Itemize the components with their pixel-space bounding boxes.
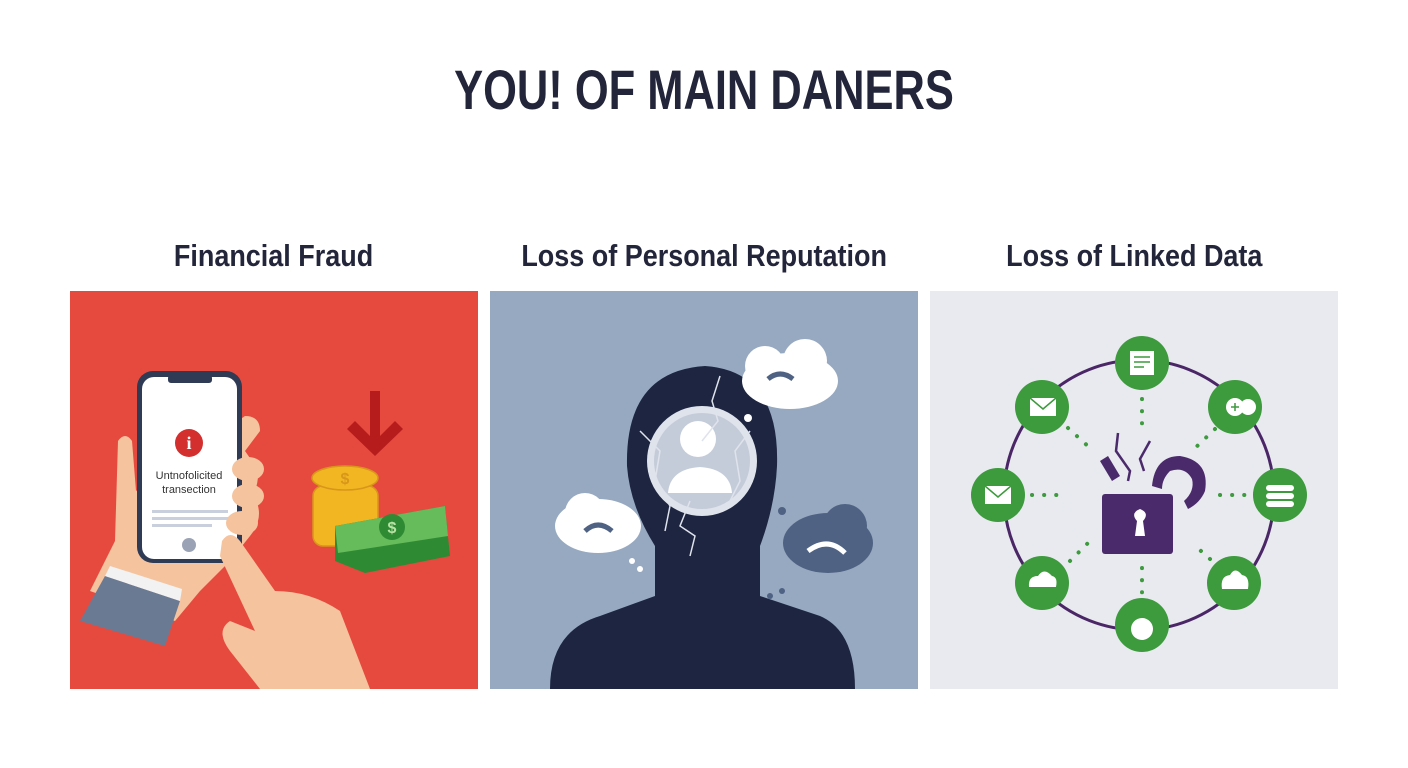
connectors bbox=[1032, 399, 1250, 596]
panel: financial fraud bbox=[70, 291, 478, 689]
icon: phone bbox=[137, 371, 242, 563]
icon: down arrow bbox=[347, 391, 403, 456]
heading: linked data: Loss of Linked Data bbox=[1006, 238, 1262, 273]
icon: fingers bbox=[226, 457, 264, 535]
heading: financial fraud: Financial Fraud bbox=[174, 238, 374, 273]
icon: banknotes: $ bbox=[388, 520, 397, 537]
icon: cracked profile bbox=[640, 376, 757, 556]
icon: cloud dark right bbox=[767, 504, 873, 599]
icon: phone: i bbox=[186, 433, 192, 453]
icons: data nodes bbox=[971, 336, 1307, 652]
title: YOU! OF MAIN DANERS bbox=[454, 58, 954, 121]
heading: reputation: Loss of Personal Reputation bbox=[521, 238, 887, 273]
icon: cloud left bbox=[555, 493, 643, 572]
icon: holding hand bbox=[80, 416, 260, 646]
icon: coins: $ bbox=[341, 471, 350, 488]
icon: silhouette bbox=[550, 366, 855, 689]
panel: linked data bbox=[930, 291, 1338, 689]
panel: reputation bbox=[490, 291, 918, 689]
icon: cloud top-right bbox=[742, 339, 838, 422]
icon: pointing hand bbox=[220, 535, 370, 689]
ring bbox=[1004, 360, 1274, 630]
icon: banknotes bbox=[335, 506, 450, 573]
icon: phone: Untnofolicited bbox=[156, 470, 222, 482]
icon: phone: transection bbox=[162, 484, 216, 496]
icon: coins bbox=[312, 466, 378, 546]
icon: broken lock bbox=[1100, 433, 1206, 554]
